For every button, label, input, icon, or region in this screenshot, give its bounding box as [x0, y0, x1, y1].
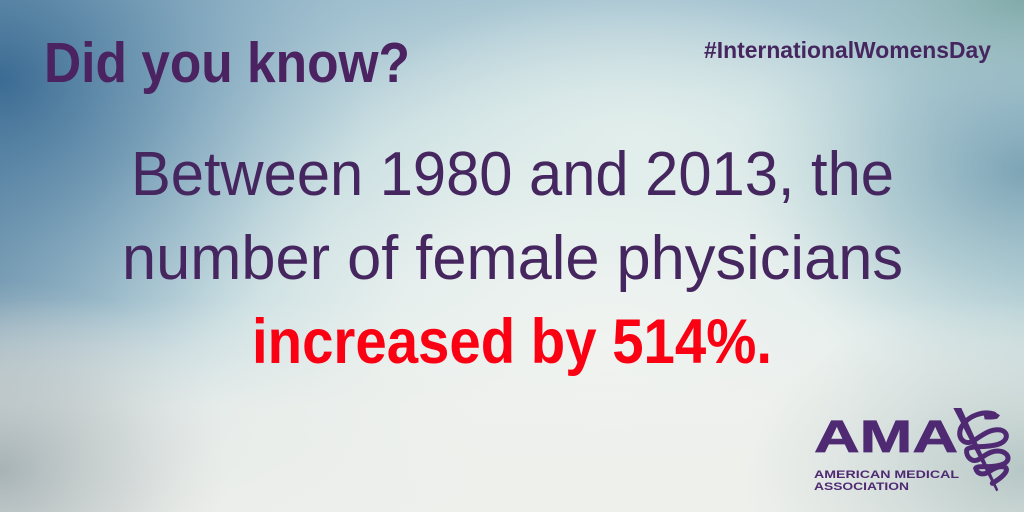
logo wordmark: AMA — [814, 411, 958, 462]
icon: rod with serpent — [953, 408, 1008, 491]
AMA logo — [814, 408, 1008, 493]
highlighted statistic: increased by 514%. — [252, 307, 772, 377]
heading: did you know: Did you know? — [44, 31, 410, 95]
logo organisation name — [814, 469, 959, 493]
hashtag: #InternationalWomensDay — [704, 37, 991, 63]
main statement: Between 1980 and 2013, the — [131, 140, 894, 209]
main statement — [122, 140, 903, 377]
logo organisation name: ASSOCIATION — [814, 481, 909, 493]
main statement: number of female physicians — [122, 224, 903, 293]
logo organisation name: AMERICAN MEDICAL — [814, 469, 959, 481]
